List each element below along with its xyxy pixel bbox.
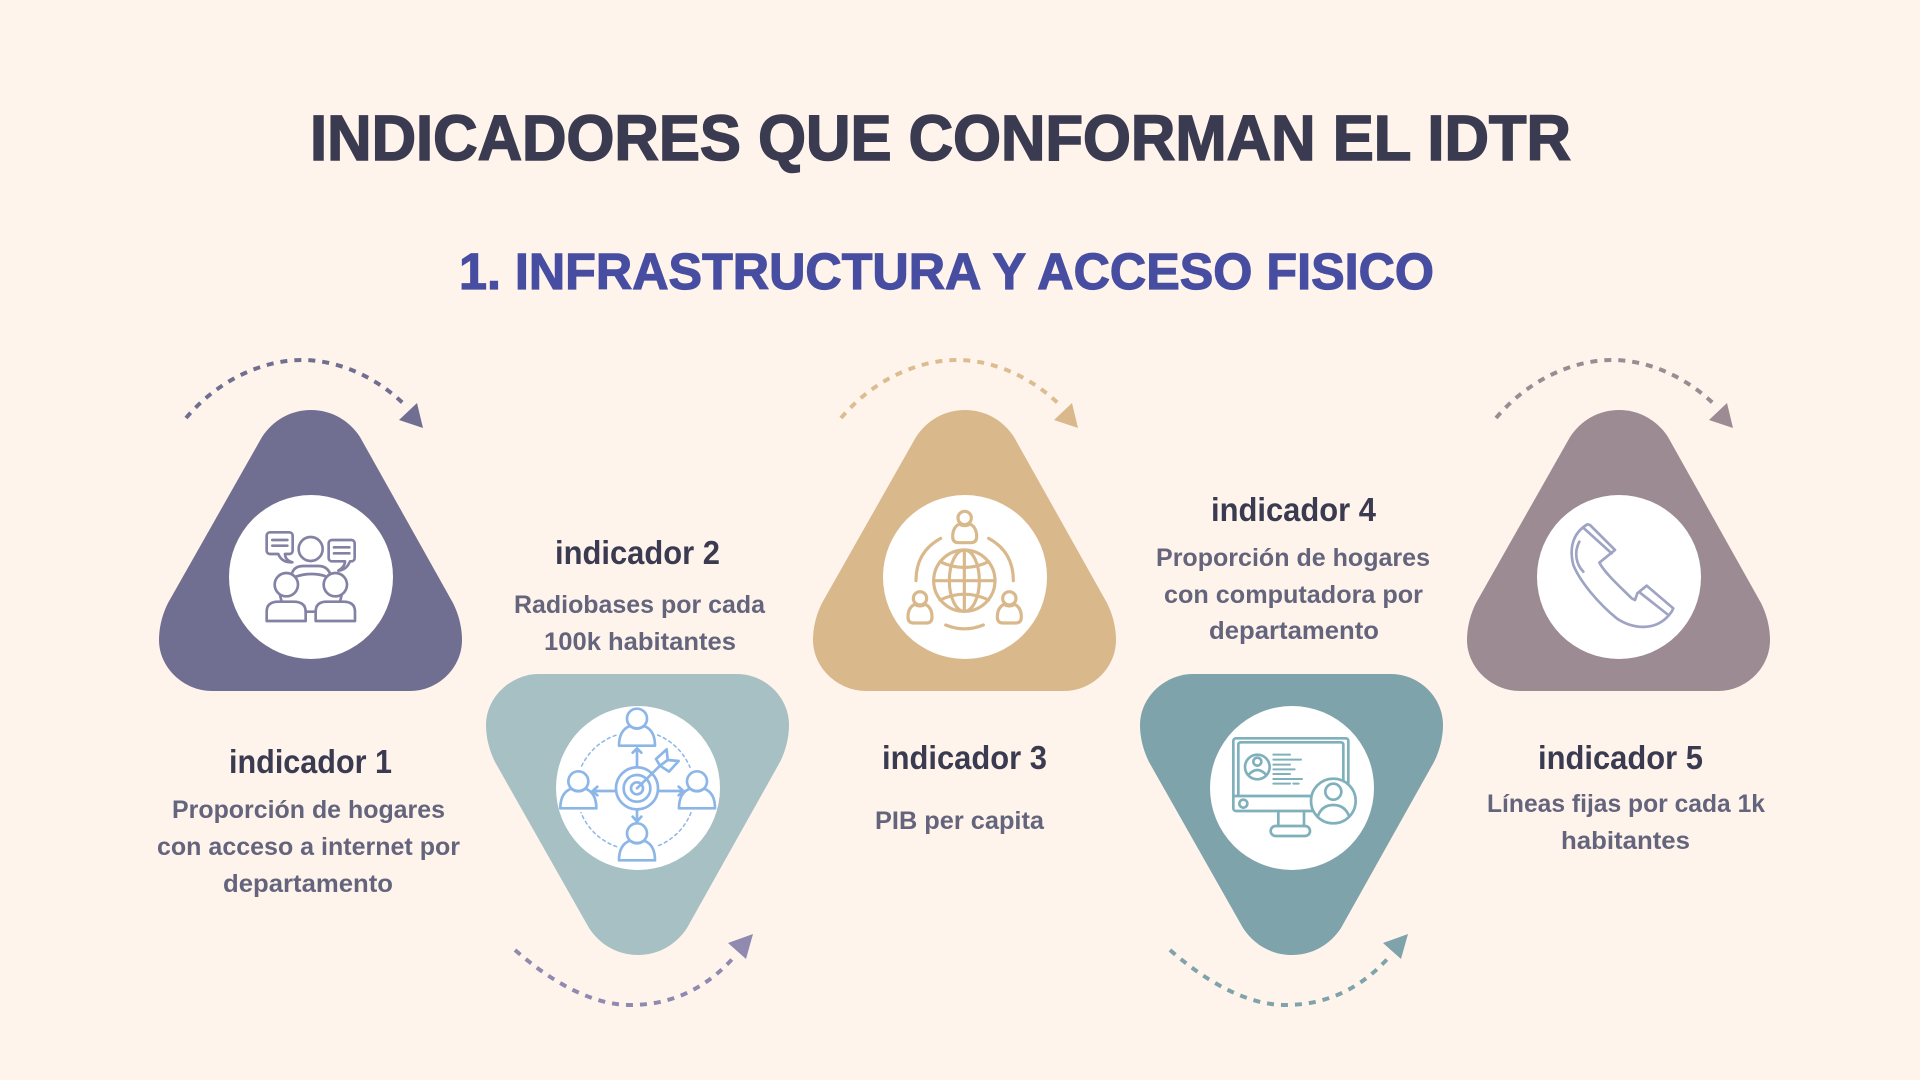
description: indicador 4: departamento bbox=[1209, 617, 1379, 645]
arrow: indicador 3 bbox=[841, 360, 1078, 428]
description: indicador 3: PIB per capita bbox=[875, 807, 1045, 835]
icon: people talking bbox=[267, 532, 355, 621]
arrow: indicador 5 bbox=[1496, 360, 1733, 428]
panel: indicador 1 bbox=[157, 360, 462, 898]
arrow: indicador 1 bbox=[186, 360, 423, 428]
subtitle: 1. INFRASTRUCTURA Y ACCESO FISICO bbox=[459, 243, 1434, 300]
triangle: indicador 4 bbox=[1140, 674, 1443, 955]
description: indicador 4 bbox=[1156, 544, 1430, 645]
icon circle: indicador 3 bbox=[883, 495, 1047, 659]
description: indicador 5: habitantes bbox=[1561, 827, 1690, 855]
panel: indicador 2 bbox=[486, 534, 789, 1005]
description: indicador 1: departamento bbox=[223, 870, 393, 898]
icon circle: indicador 2 bbox=[556, 706, 720, 870]
heading: indicador 4: indicador 4 bbox=[1211, 491, 1377, 528]
icon: target and people bbox=[560, 709, 715, 860]
triangle: indicador 2 bbox=[486, 674, 789, 955]
description: indicador 1: con acceso a internet por bbox=[157, 833, 460, 861]
panel: indicador 4 bbox=[1140, 491, 1443, 1005]
icon: telephone handset bbox=[1572, 524, 1673, 627]
triangle: indicador 1 bbox=[159, 410, 462, 691]
description: indicador 2: 100k habitantes bbox=[544, 628, 736, 656]
panel: indicador 5 bbox=[1467, 360, 1770, 855]
icon: computer with user profile bbox=[1233, 738, 1356, 836]
icon circle: indicador 4 bbox=[1210, 706, 1374, 870]
description: indicador 5 bbox=[1487, 790, 1765, 855]
description: indicador 2: Radiobases por cada bbox=[514, 591, 766, 619]
icon: globe and people bbox=[908, 511, 1021, 629]
description: indicador 2 bbox=[514, 591, 766, 656]
description: indicador 1 bbox=[157, 796, 460, 898]
title: INDICADORES QUE CONFORMAN EL IDTR bbox=[310, 102, 1571, 174]
triangle: indicador 3 bbox=[813, 410, 1116, 691]
description: indicador 1: Proporción de hogares bbox=[172, 796, 445, 824]
description: indicador 5: Líneas fijas por cada 1k bbox=[1487, 790, 1765, 818]
heading: indicador 1: indicador 1 bbox=[229, 743, 392, 780]
icon circle: indicador 5 bbox=[1537, 495, 1701, 659]
icon circle: indicador 1 bbox=[229, 495, 393, 659]
triangle: indicador 5 bbox=[1467, 410, 1770, 691]
description: indicador 4: Proporción de hogares bbox=[1156, 544, 1430, 572]
description: indicador 4: con computadora por bbox=[1164, 581, 1423, 609]
panel: indicador 3 bbox=[813, 360, 1116, 835]
arrow: indicador 2 bbox=[515, 934, 753, 1005]
heading: indicador 2: indicador 2 bbox=[555, 534, 720, 571]
arrow: indicador 4 bbox=[1170, 934, 1408, 1005]
heading: indicador 5: indicador 5 bbox=[1538, 739, 1703, 776]
heading: indicador 3: indicador 3 bbox=[882, 739, 1047, 776]
